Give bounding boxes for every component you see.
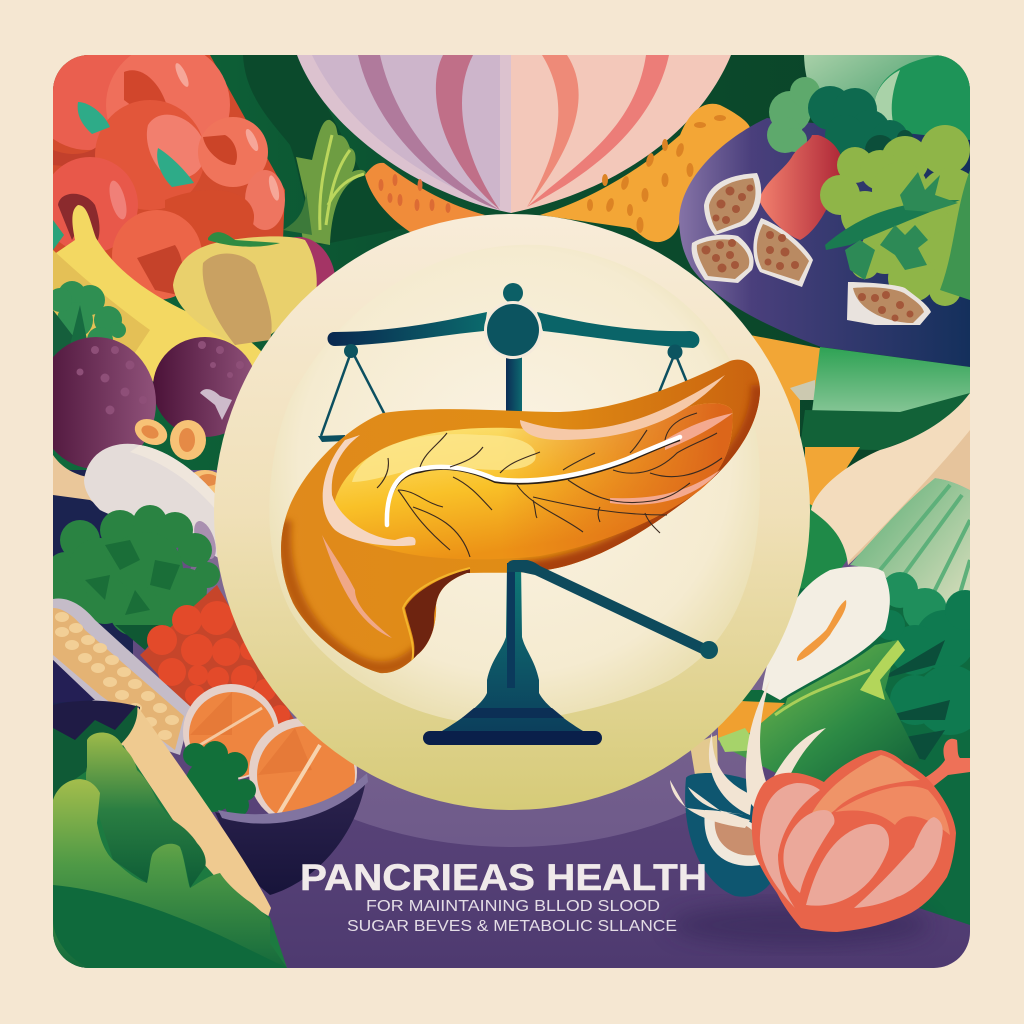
soft shadow beneath pepper bbox=[670, 903, 930, 947]
inner glow bbox=[269, 245, 760, 725]
cream tentacles bbox=[670, 680, 826, 828]
bowl body bbox=[215, 773, 367, 895]
tomato leaf 2 bbox=[157, 148, 194, 187]
golden fruit right of onion bbox=[540, 104, 750, 242]
green shell bbox=[790, 500, 847, 590]
teal bowl bottom right bbox=[685, 773, 780, 897]
green celery bbox=[812, 347, 970, 413]
right pan bbox=[658, 344, 688, 395]
green base behind lettuce bbox=[53, 745, 287, 968]
lettuce upper leaf bbox=[86, 733, 206, 888]
pepper stem bbox=[918, 739, 970, 793]
wedge of colours at circle edge bbox=[690, 690, 790, 775]
pink right streaks bbox=[610, 413, 733, 505]
pink upper right highlight bbox=[520, 375, 725, 440]
upper pole bbox=[506, 350, 522, 415]
lighter purple band under circle bbox=[190, 556, 766, 847]
tomato cluster bbox=[53, 55, 285, 300]
white bulb bbox=[762, 566, 890, 700]
orange slice 2 bbox=[249, 718, 357, 814]
purple plate bbox=[679, 118, 970, 367]
cream bowl rim bbox=[53, 455, 94, 502]
small broccoli bbox=[183, 741, 256, 817]
onion dome at top bbox=[297, 55, 731, 213]
tomato leaf 1 bbox=[78, 102, 110, 134]
white mushroom cap bbox=[84, 444, 222, 562]
pepper body bbox=[752, 750, 956, 932]
coral bell pepper bbox=[752, 739, 970, 932]
radish behind pepper bbox=[292, 236, 334, 288]
dark leaf bbox=[53, 705, 138, 800]
pink rim highlight bbox=[323, 435, 416, 546]
pancreas body bbox=[281, 360, 760, 673]
green sprout bbox=[283, 120, 366, 245]
green fan leaf bbox=[850, 478, 970, 620]
top knob bbox=[503, 283, 523, 303]
dark green backdrop bbox=[53, 55, 970, 475]
lettuce shadow bbox=[53, 885, 287, 968]
yellow inner lobe bbox=[334, 403, 733, 559]
yellow bell pepper bbox=[173, 232, 317, 345]
tan flatbread wrap bbox=[115, 707, 271, 917]
balance scale top bbox=[318, 283, 699, 442]
main title: PANCRIEAS HEALTH bbox=[300, 857, 707, 898]
balance scale stand bbox=[423, 560, 718, 745]
fine veins bbox=[377, 413, 722, 557]
dark parsley bbox=[767, 77, 913, 165]
shaded edges and underside bbox=[284, 385, 760, 668]
lower pole and base bbox=[423, 563, 602, 745]
central hub bbox=[484, 301, 542, 359]
darker green backdrop region bbox=[243, 55, 420, 245]
left pan bbox=[318, 344, 385, 442]
infographic canvas bbox=[53, 55, 970, 968]
parsley top left bbox=[53, 281, 126, 355]
yellow squash bbox=[53, 205, 262, 382]
fig slice C bbox=[753, 218, 813, 287]
dark broccoli bbox=[47, 505, 220, 650]
dark bowl back bbox=[53, 700, 140, 740]
fig slice D bbox=[847, 282, 931, 325]
pepper lobes bbox=[760, 783, 820, 908]
dark broccoli right bbox=[860, 572, 985, 760]
dark bowl with orange slices bbox=[183, 684, 368, 895]
dark green stalk bbox=[800, 393, 970, 450]
right dark green backdrop bbox=[787, 577, 970, 925]
left beam bbox=[328, 312, 487, 346]
golden fruit lower right bbox=[750, 335, 860, 560]
bowl rim bbox=[218, 773, 368, 824]
pale upper highlight bbox=[352, 434, 536, 482]
pasta rings bbox=[134, 419, 217, 494]
circular backdrop bbox=[214, 214, 810, 810]
orange right side overlay bbox=[500, 403, 733, 558]
navy under tray bbox=[53, 660, 95, 703]
subtitle line 1: FOR MAIINTAINING BLLOD SLOOD bbox=[366, 898, 660, 915]
main duct white bbox=[387, 437, 680, 525]
left navy backdrop bbox=[53, 470, 133, 710]
main duct shadow bbox=[387, 440, 680, 523]
lettuce lower leaf bbox=[53, 779, 287, 968]
purple beets bbox=[53, 337, 252, 468]
fig slice A bbox=[704, 173, 761, 235]
right beam bbox=[537, 312, 699, 348]
leek stalk bbox=[720, 640, 920, 790]
grain tray bbox=[53, 599, 192, 755]
purple lower backdrop bbox=[53, 470, 970, 968]
red radish bbox=[759, 135, 844, 240]
small red tomatoes bbox=[140, 585, 300, 730]
golden stripe behind turnip bbox=[805, 447, 860, 510]
pancreas organ bbox=[281, 360, 760, 673]
title text bbox=[300, 857, 707, 935]
cream turnip bbox=[811, 393, 970, 565]
lower diagonal arm bbox=[507, 560, 718, 659]
subtitle line 2: SUGAR BEVES & METABOLIC SLLANCE bbox=[347, 918, 677, 935]
top right green vegetables bbox=[804, 55, 970, 160]
lime parsley with dark leaf bbox=[820, 125, 982, 306]
pepper top peach bbox=[805, 755, 920, 828]
fig slice B bbox=[692, 235, 754, 283]
orange fruit left of onion bbox=[365, 163, 485, 232]
orange slice 1 bbox=[183, 684, 279, 780]
